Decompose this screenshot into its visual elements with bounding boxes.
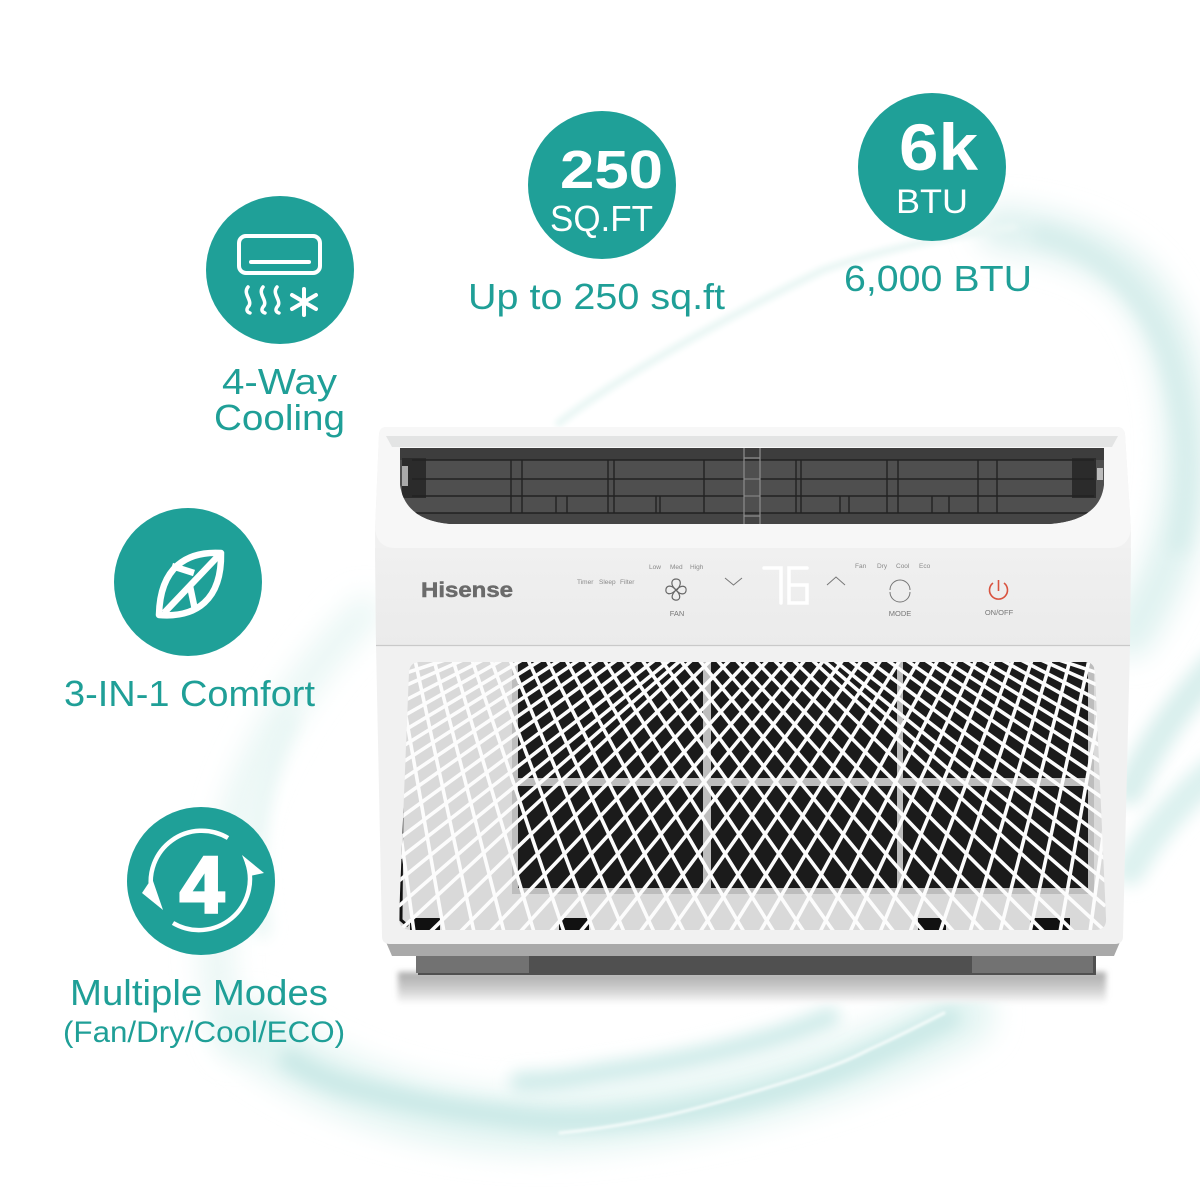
- badge number: 6k: [899, 110, 978, 184]
- feature: 250 sq.ft coverage: [468, 111, 725, 317]
- badge unit: BTU: [896, 183, 968, 221]
- right foot pad: [972, 956, 1093, 973]
- timer labels: [577, 579, 635, 586]
- fan speed labels: High: [690, 564, 704, 571]
- feature: 3-in-1 comfort: [64, 508, 315, 714]
- badge circle: [206, 196, 354, 344]
- badge circle: [127, 807, 275, 955]
- recess shade: [386, 436, 1118, 447]
- dark underside: [418, 956, 1096, 975]
- air vent: [400, 448, 1104, 524]
- front grille: [377, 660, 1127, 932]
- badge number: 250: [560, 140, 663, 200]
- timer labels: Filter: [620, 579, 635, 586]
- feature caption: 4-Way: [222, 361, 337, 402]
- fan label: FAN: [670, 609, 684, 618]
- mode labels: Cool: [896, 563, 910, 570]
- icon: leaf: [159, 553, 221, 615]
- fan speed labels: [649, 564, 704, 571]
- icon: fan: [666, 579, 686, 600]
- mode labels: Fan: [855, 563, 867, 570]
- icon: up chevron: [827, 577, 845, 585]
- on off label: ON/OFF: [985, 608, 1014, 617]
- timer labels: Timer: [577, 579, 594, 586]
- floor shadow: [398, 972, 1106, 1002]
- mode label: MODE: [889, 609, 911, 618]
- badge circle: [528, 111, 676, 259]
- feature caption: Multiple Modes: [70, 972, 328, 1013]
- badge number: 4: [180, 840, 225, 929]
- background: teal air swoosh: [216, 227, 1200, 1133]
- fan speed labels: Med: [670, 564, 683, 571]
- base strip: [386, 942, 1120, 956]
- icon: power: [990, 580, 1008, 599]
- feature: multiple modes: [63, 807, 345, 1049]
- badge circle: [114, 508, 262, 656]
- left foot pad: [416, 956, 529, 973]
- mode labels: Dry: [877, 563, 888, 570]
- feature caption: Up to 250 sq.ft: [468, 276, 725, 317]
- top cover: [375, 427, 1131, 548]
- filter panels: [518, 662, 1088, 888]
- timer labels: Sleep: [599, 579, 616, 586]
- filter frame: [512, 660, 1094, 894]
- unit body: [375, 427, 1131, 944]
- mode labels: Eco: [919, 563, 931, 570]
- feature caption: 6,000 BTU: [844, 258, 1032, 299]
- fan speed labels: Low: [649, 564, 661, 571]
- clip marks: [410, 918, 1070, 930]
- air conditioner unit: [375, 427, 1131, 1002]
- feature: 4-way cooling: [206, 196, 354, 438]
- badge circle: [858, 93, 1006, 241]
- badge unit: SQ.FT: [550, 198, 653, 239]
- icon: down chevron: [725, 578, 742, 585]
- icon: mode circle: [890, 580, 910, 602]
- icon: air conditioner and snowflake: [239, 236, 320, 315]
- mode labels: [855, 563, 931, 570]
- lattice lines: [377, 660, 1127, 932]
- feature caption second line: Cooling: [214, 397, 345, 438]
- feature caption: 3-IN-1 Comfort: [64, 673, 315, 714]
- brand logo: Hisense: [421, 579, 513, 602]
- icon: circular arrows: [142, 831, 264, 930]
- control panel: [375, 548, 1131, 645]
- feature sub caption: (Fan/Dry/Cool/ECO): [63, 1016, 345, 1049]
- feature: 6k BTU: [844, 93, 1032, 299]
- temperature display: [764, 568, 807, 603]
